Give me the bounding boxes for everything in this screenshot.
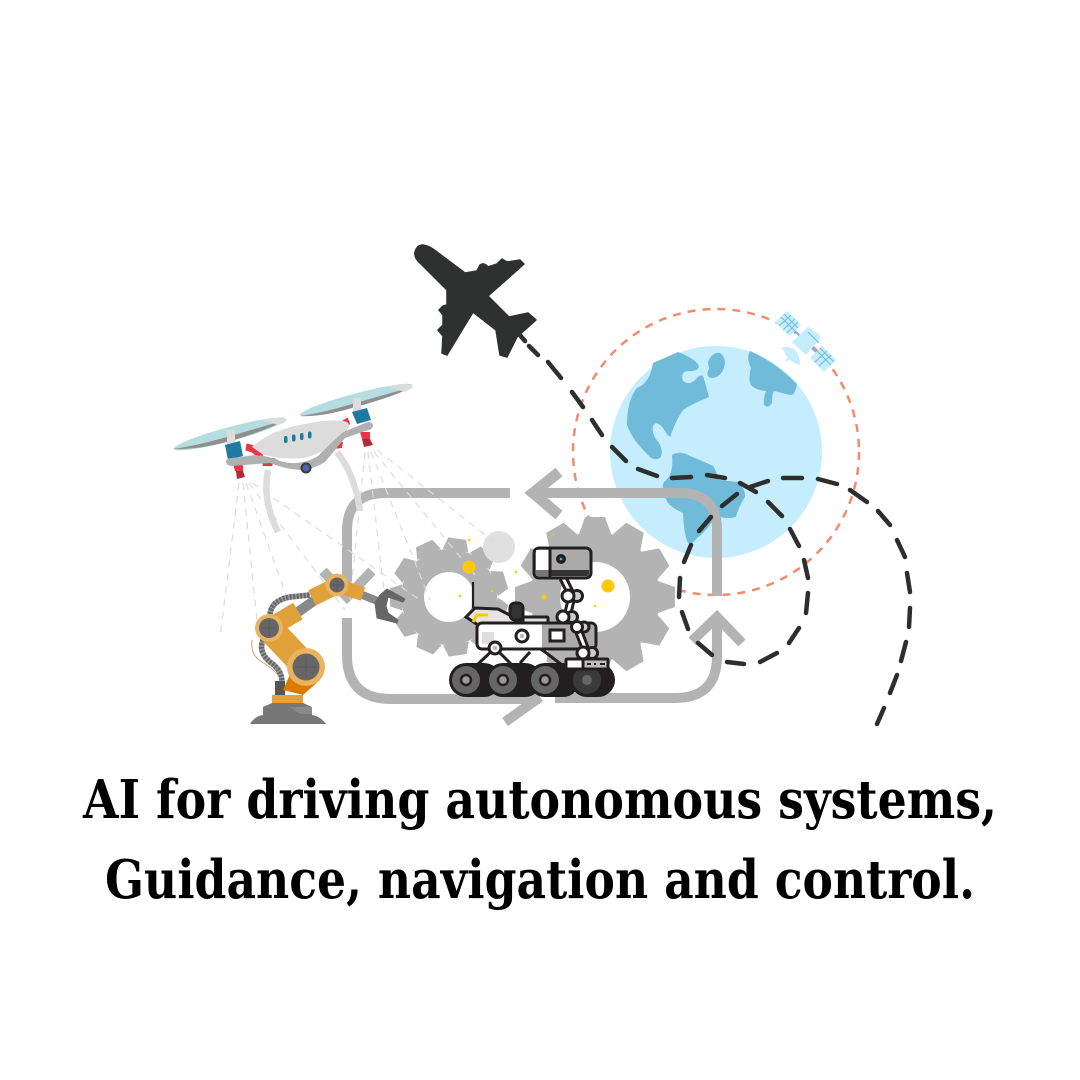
icon: airplane: [415, 245, 536, 357]
orbit ring: [573, 309, 859, 595]
arm hoses: [262, 595, 310, 682]
gear: right: [515, 517, 675, 677]
arm lower mount: [272, 670, 320, 703]
control loop with arrows: [323, 472, 742, 722]
rover: [449, 548, 615, 697]
robot arm: [250, 574, 405, 724]
arm joints: [255, 574, 348, 686]
drone camera: [300, 462, 312, 474]
drone body: [252, 420, 349, 458]
rover rear deck: [466, 582, 548, 625]
drone right rotor: [298, 379, 414, 421]
drone windows: [284, 432, 312, 443]
gear: left: [390, 537, 509, 657]
drone legs: [266, 452, 360, 532]
icon: satellite: [775, 311, 836, 372]
rover front box: [566, 659, 608, 669]
drone arm: [226, 422, 373, 470]
arm gripper: [375, 589, 405, 623]
sparkle dots: [459, 534, 614, 607]
spray dashed lines: [220, 450, 498, 638]
arm segments: [269, 585, 380, 667]
spray light circle: [483, 531, 515, 563]
rover suspension: [478, 636, 562, 665]
dashed flight path: [519, 334, 910, 724]
arm base: [250, 703, 326, 724]
rover wheels: [449, 663, 615, 697]
title: [82, 769, 997, 911]
globe with continents: [610, 346, 822, 558]
drone: [172, 379, 414, 532]
rover neck and joints: [489, 578, 598, 659]
arm wires: [252, 640, 280, 678]
rover head camera: [534, 548, 591, 578]
rover body: [477, 623, 596, 649]
drone motors and nozzles: [225, 408, 373, 479]
drone left rotor: [172, 412, 288, 456]
